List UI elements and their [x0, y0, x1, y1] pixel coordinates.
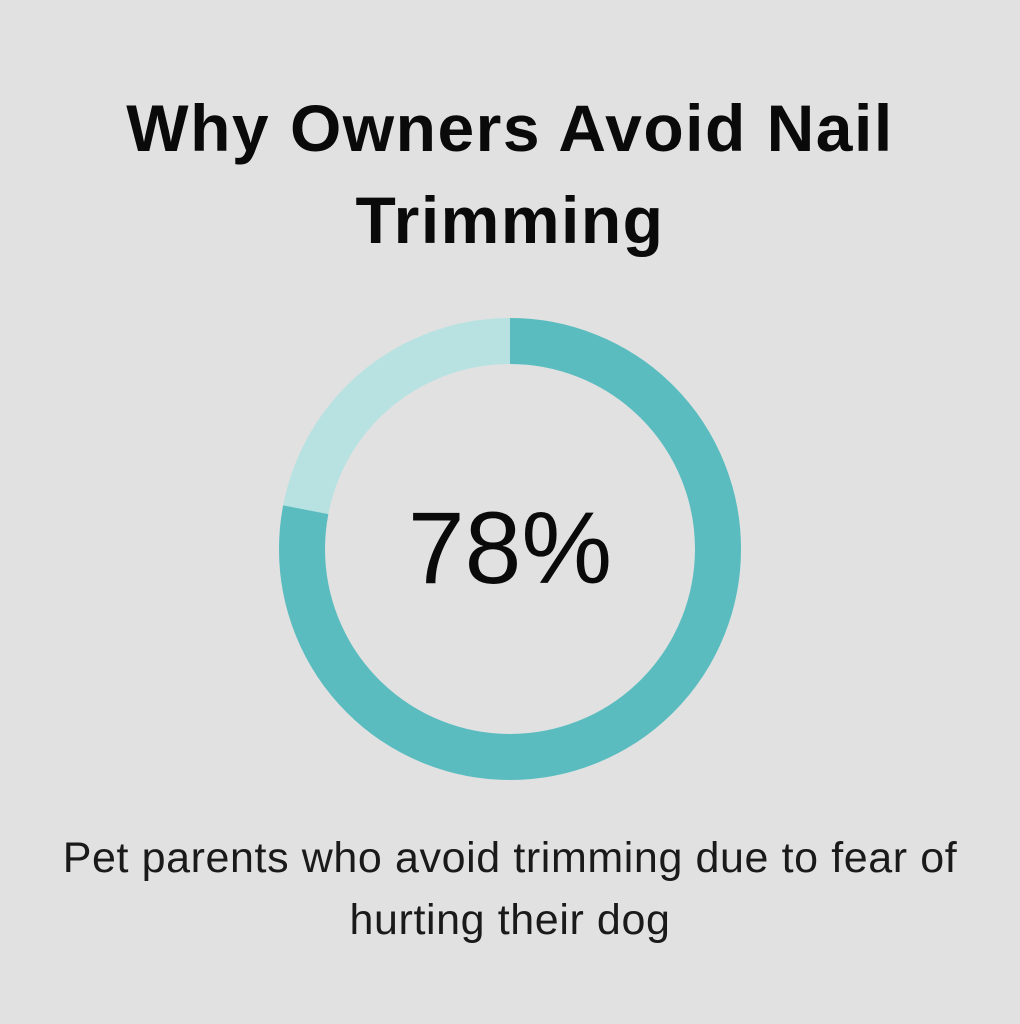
caption [63, 834, 957, 944]
donut remainder segment [302, 341, 718, 757]
title: Why Owners Avoid Nail [126, 91, 894, 165]
caption: Pet parents who avoid trimming due to fear of [63, 834, 957, 882]
caption: hurting their dog [350, 896, 670, 944]
donut 78% segment [302, 341, 718, 757]
percentage label: 78% [408, 491, 612, 605]
title [126, 91, 894, 257]
title: Trimming [355, 183, 665, 257]
